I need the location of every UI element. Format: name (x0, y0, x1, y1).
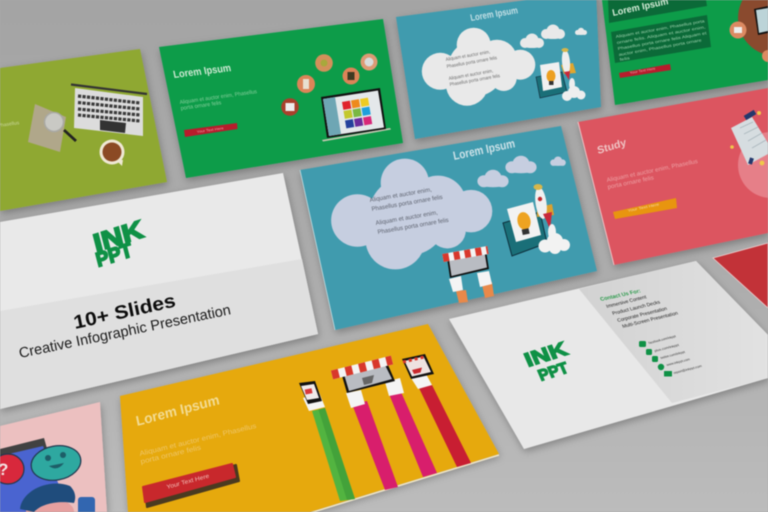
heading: top teal title: Lorem Ipsum (469, 5, 519, 24)
text block: large cloud copy: Aliquam et auctor enim, (375, 209, 439, 227)
heading: large teal title: Lorem Ipsum (452, 136, 516, 163)
illustration: red arm with basket tablet (402, 354, 471, 467)
text: contact details: www.inkppt.com (666, 357, 691, 367)
panel: teal cloud slide, top (396, 0, 601, 139)
icon: notebook and magnifier (28, 104, 76, 152)
text block: services list: Corporate Presentation (616, 306, 668, 324)
logo: INK PPT: INK (91, 215, 146, 258)
icon: laptop with colour tiles (321, 88, 391, 142)
button: study orange (613, 198, 677, 219)
text: contact details: twitter.com/inkppt (660, 350, 686, 360)
logo: INK PPT small: INK (521, 338, 572, 372)
text block: services list: Immersive Content (605, 294, 648, 310)
text block: white cloud copy: Aliquam et auctor enim, (445, 49, 491, 63)
text block: dark green box: auctor enim, Phasellus porta ornare (618, 37, 703, 57)
heading box: title (608, 0, 707, 23)
heading: Study: Study (596, 137, 627, 157)
logo: INK PPT (91, 215, 146, 272)
text block: large cloud copy: Aliquam et auctor enim, (369, 186, 433, 204)
panel: olive laptop slide (0, 49, 167, 211)
panel: red corner slide (713, 243, 768, 308)
button: green text slide: Your Text Here (629, 67, 656, 75)
text block: white cloud copy (445, 49, 501, 88)
text block: services list: Product Launch Decks (611, 299, 662, 317)
text: contact details (648, 334, 703, 375)
illustration: green arm with phone (299, 381, 355, 501)
icon: coffee cup (100, 140, 124, 166)
logo: INK PPT small (521, 338, 572, 385)
text block: dark green box: ornare felis. Aliquam et auctor enim, (616, 24, 706, 45)
panel: green devices slide (159, 19, 403, 178)
icon: person head (20, 483, 95, 512)
text block: study body: Aliquam et auctor enim, Phasellus (606, 159, 698, 184)
right gray panel (579, 261, 768, 403)
text block: services list: Multi-Screen Presentation (621, 311, 679, 330)
button: study orange: Your Text Here (627, 203, 660, 213)
text block: yellow slide body: Aliquam et auctor enim, Phasellus (139, 423, 258, 458)
heading: green slide title: Lorem Ipsum (172, 62, 232, 81)
text: contact details: report@inkppt.com (673, 364, 703, 375)
icon: scroll with stars (730, 111, 768, 198)
subheading: Creative Infographic Presentation: Creative Infographic Presentation (18, 302, 232, 362)
heading: Contact Us For: Contact Us For: (599, 289, 642, 303)
text block: services list (605, 294, 679, 330)
text: contact details: plus.com/inkppt (654, 343, 680, 353)
lower band (0, 259, 318, 409)
text block: dark green box: Aliquam et auctor enim, Phasellus porta (615, 18, 706, 39)
button: red 3D (143, 464, 239, 507)
text block: large cloud copy: Phasellus porta ornare felis (371, 194, 443, 213)
text block: large cloud copy (369, 186, 449, 236)
illustration: shop screen held by arms (443, 250, 494, 303)
text block: green slide body (179, 89, 258, 112)
button: red 3D: Your Text Here (166, 473, 211, 491)
text: contact details: facebook.com/inkppt (648, 334, 677, 345)
logo: INK PPT: PPT (94, 239, 135, 272)
illustration: small clouds (520, 24, 587, 48)
heading: yellow slide title: Lorem Ipsum (134, 391, 221, 429)
text block: green slide body: porta ornare felis (180, 100, 222, 112)
illustration: rocket and idea card (536, 48, 586, 101)
contact list with icons (639, 334, 703, 376)
icon: teal smile bubble (28, 442, 84, 484)
illustration: pink arms with shop screen (332, 358, 437, 490)
text block: large cloud copy: Phasellus porta ornare felis (377, 217, 449, 236)
text block: green slide body: Aliquam et auctor enim, Phasellus (179, 89, 258, 106)
panel: yellow shop slide (120, 324, 499, 512)
illustration: small lavender clouds (477, 156, 566, 187)
icon: orange app circles (281, 54, 378, 116)
icon: laptop behind bubbles (0, 438, 48, 512)
icon: laptop keyboard (71, 84, 147, 136)
text block: dark green box: felis (619, 55, 630, 62)
illustration: large lavender cloud (331, 159, 492, 269)
illustration: rocket with idea card (503, 184, 570, 256)
text block: study body: porta ornare felis (607, 175, 654, 191)
text block: white cloud copy: Phasellus porta ornare felis (449, 73, 501, 88)
text block: yellow slide body (139, 423, 258, 466)
icon: brown circle with laptop (730, 0, 768, 62)
panel: white contact slide (449, 261, 768, 449)
text block: white cloud copy: Aliquam et auctor enim, (448, 68, 494, 82)
panel: coral study slide (578, 88, 768, 265)
illustration: white cloud (422, 28, 535, 106)
text block: dark green box: Phasellus porta ornare felis Aliquam et (617, 30, 708, 51)
button: green slide: Your Text Here (196, 126, 224, 134)
icons: social badges (639, 341, 672, 376)
button: green text slide (619, 64, 671, 78)
panel: green text slide, top right (602, 0, 768, 105)
panel: white title slide (0, 173, 318, 409)
text block: dark green box (611, 15, 711, 63)
panel: teal cloud slide, large (300, 126, 597, 330)
heading: 10+ Slides: 10+ Slides (72, 291, 178, 334)
panel: pink chat slide (0, 402, 107, 512)
text block: white cloud copy: Phasellus porta ornare felis (446, 55, 498, 70)
logo: INK PPT small: PPT (535, 359, 571, 385)
button: green slide (184, 123, 238, 137)
text block: yellow slide body: porta ornare felis (140, 444, 202, 466)
